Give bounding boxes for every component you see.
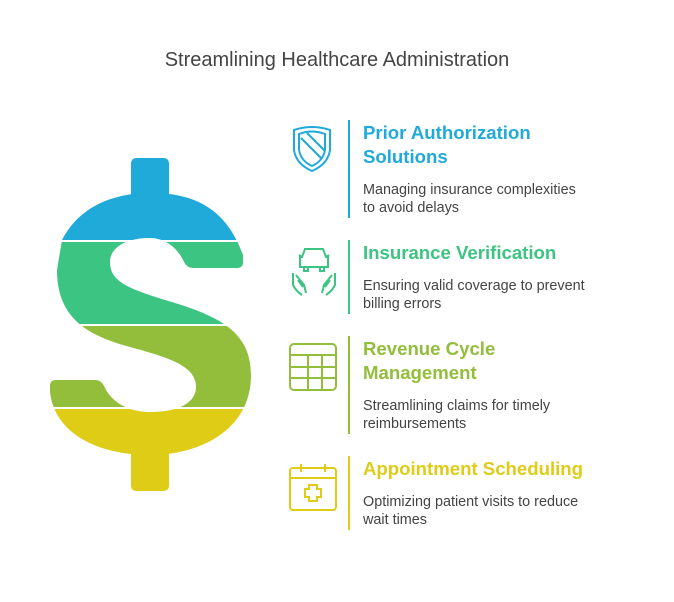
item 3 <box>348 336 550 434</box>
text: Ensuring valid coverage to prevent <box>363 278 585 294</box>
text: Appointment Scheduling <box>363 458 583 479</box>
text: Streamlining claims for timely <box>363 398 550 414</box>
text: Solutions <box>363 146 448 167</box>
dollar sign graphic <box>50 158 251 491</box>
text: reimbursements <box>363 416 466 432</box>
icon: calendar with cross <box>289 464 337 511</box>
icon: car in hands <box>292 248 336 296</box>
icon: table grid <box>289 343 337 391</box>
icon: shield <box>293 126 331 172</box>
title: Streamlining Healthcare Administration <box>165 49 509 71</box>
text: Revenue Cycle <box>363 338 495 359</box>
text: Optimizing patient visits to reduce <box>363 494 578 510</box>
item 2 <box>348 240 585 314</box>
text: Insurance Verification <box>363 242 556 263</box>
text: billing errors <box>363 296 441 312</box>
text: to avoid delays <box>363 200 459 216</box>
text: Management <box>363 362 477 383</box>
item 4 <box>348 456 583 530</box>
text: Prior Authorization <box>363 122 531 143</box>
text: wait times <box>363 512 427 528</box>
text: Managing insurance complexities <box>363 182 576 198</box>
item 1 <box>348 120 576 218</box>
